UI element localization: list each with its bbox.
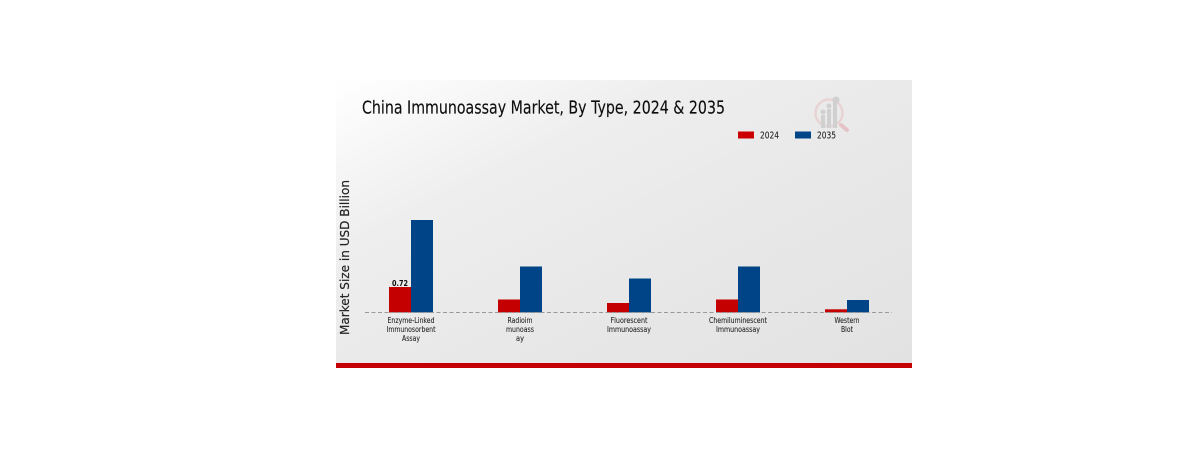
label: Enzyme-Linked Immunosorbent Assay: Immunosorbent [386,325,436,334]
icon: watermark logo [816,96,847,130]
label: Chemiluminescent Immunoassay: Immunoassay [716,325,760,334]
label: Enzyme-Linked Immunosorbent Assay: Assay [402,334,420,343]
bar chart [389,220,869,312]
bars: Radioimmunoassay [498,266,542,312]
label: Radioimmunoassay: Radioim [508,316,533,325]
label: Western Blot: Western [834,316,860,325]
footer red band [336,363,912,368]
bars: Western Blot [825,300,869,312]
label: Enzyme-Linked Immunosorbent Assay: Enzyme-Linked [388,316,434,325]
bars: Enzyme-Linked Immunosorbent Assay [389,220,433,312]
category labels [386,316,860,343]
legend item: 2024: 2024 [760,130,779,142]
label: Fluorescent Immunoassay: Immunoassay [607,325,651,334]
label: Chemiluminescent Immunoassay: Chemiluminescent [709,316,767,325]
bars: Fluorescent Immunoassay [607,278,651,312]
label: Fluorescent Immunoassay: Fluorescent [610,316,648,325]
y axis label: Market Size in USD Billion [337,180,352,335]
panel: chart background [336,80,912,368]
value label: 0.72 [392,279,408,288]
title: China Immunoassay Market, By Type, 2024 & 2035 [362,98,725,118]
label: Western Blot: Blot [841,325,853,334]
label: Radioimmunoassay: munoass [506,325,534,334]
label: Radioimmunoassay: ay [516,334,524,343]
legend item: 2035: 2035 [817,130,836,142]
legend [738,130,836,142]
bars: Chemiluminescent Immunoassay [716,266,760,312]
